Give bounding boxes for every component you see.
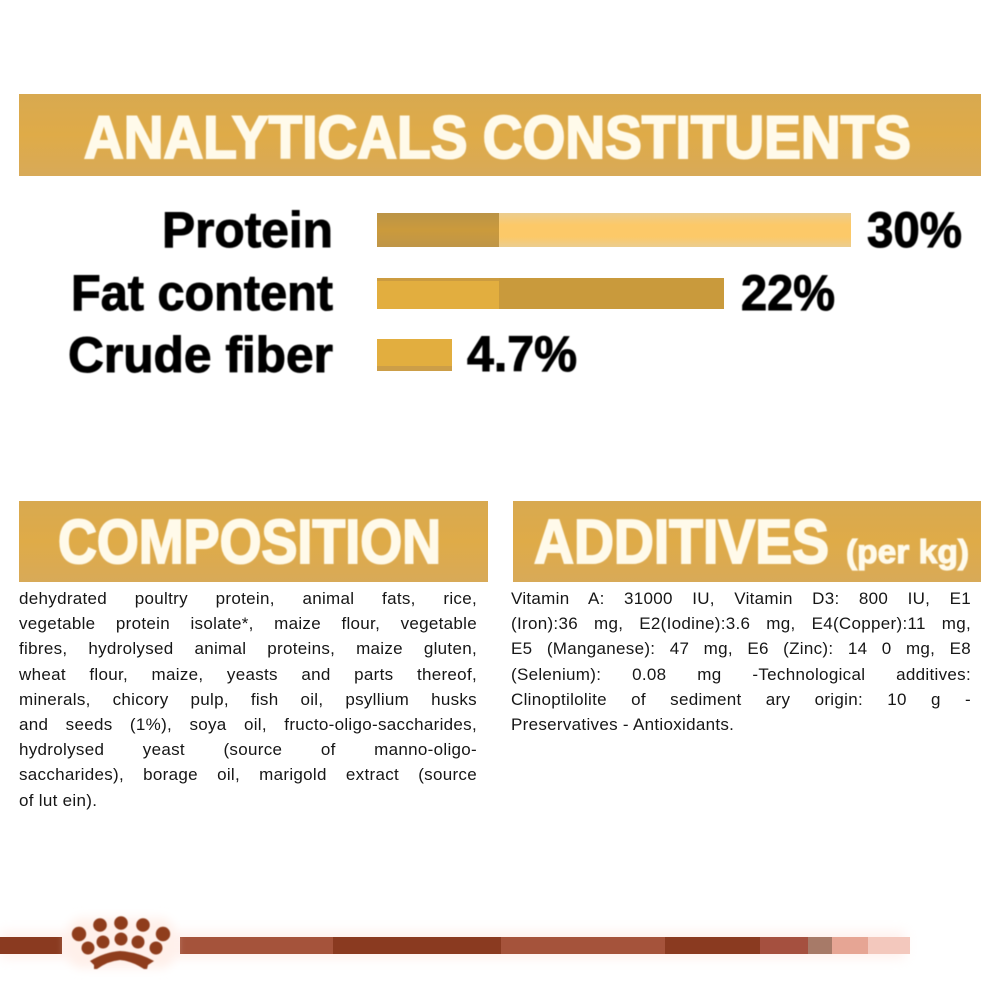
text block: additives: (Iron):36 mg, E2(Iodine):3.6 mg, E4(Copper):11 mg, [511, 614, 971, 633]
text block: composition: dehydrated poultry protein, animal fats, rice, [19, 589, 477, 608]
text block: composition: minerals, chicory pulp, fish oil, psyllium husks [19, 690, 477, 709]
text block: composition: saccharides), borage oil, marigold extract (source [19, 765, 477, 784]
footer stripe [0, 932, 910, 958]
text block: additives: Clinoptilolite of sediment ary origin: 10 g - [511, 690, 971, 709]
text block: composition: hydrolysed yeast (source of manno-oligo- [19, 740, 477, 759]
header: additives (per kg) [513, 501, 981, 582]
text block: additives: (Selenium): 0.08 mg -Technological additives: [511, 665, 971, 684]
row: crude fiber 4.7% [68, 326, 577, 383]
text block: additives: E5 (Manganese): 47 mg, E6 (Zinc): 14 0 mg, E8 [511, 639, 971, 658]
row: protein 30%: 30% [867, 202, 962, 258]
text block: additives [511, 589, 971, 734]
row: crude fiber 4.7%: Crude fiber [68, 327, 333, 383]
text block: composition: of lut ein). [19, 790, 97, 810]
row: protein 30%: Protein [162, 202, 333, 258]
text block: composition: wheat flour, maize, yeasts and parts thereof, [19, 665, 477, 684]
header: analyticals constituents: ANALYTICALS CONSTITUENTS [84, 104, 911, 171]
text block: additives: Vitamin A: 31000 IU, Vitamin D3: 800 IU, E1 [511, 589, 971, 608]
row: fat content 22% [71, 265, 835, 321]
icon: royal crown logo [68, 916, 174, 969]
row: fat content 22%: 22% [741, 265, 835, 321]
header: additives (per kg): (per kg) [846, 533, 969, 570]
text block: composition: fibres, hydrolysed animal proteins, maize gluten, [19, 639, 477, 658]
text block: additives: Preservatives - Antioxidants. [511, 715, 734, 734]
header: composition: COMPOSITION [58, 508, 441, 577]
header: additives (per kg): ADDITIVES [534, 508, 829, 577]
row: crude fiber 4.7%: 4.7% [467, 326, 577, 382]
text block: composition: and seeds (1%), soya oil, fructo-oligo-saccharides, [19, 715, 477, 734]
text block: composition: vegetable protein isolate*, maize flour, vegetable [19, 614, 477, 633]
row: fat content 22%: Fat content [71, 265, 333, 321]
text block: composition [19, 589, 477, 810]
bar chart: nutrient percentages [68, 202, 962, 383]
row: protein 30% [162, 202, 962, 258]
